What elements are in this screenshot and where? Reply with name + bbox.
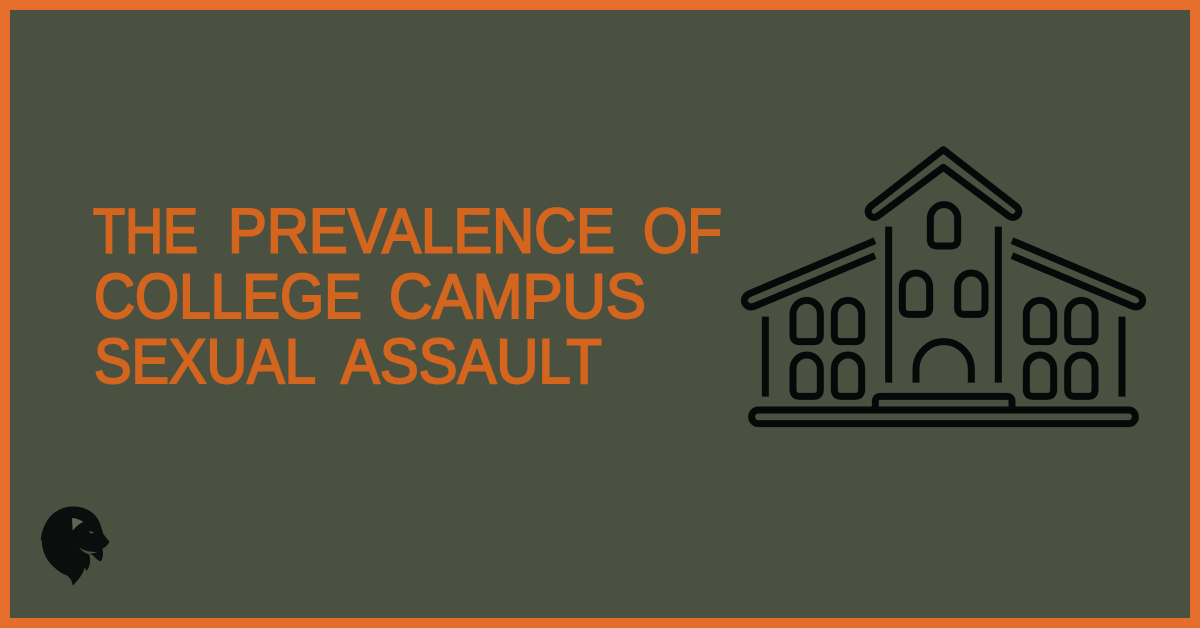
entry step — [875, 396, 1012, 410]
icon: college building — [744, 150, 1143, 424]
icon: lion head logo — [41, 507, 109, 586]
middle windows — [902, 273, 985, 314]
lion jaw gap — [79, 547, 97, 554]
lion eye — [89, 531, 95, 534]
right wing windows — [1026, 300, 1095, 396]
title: CAMPUS — [389, 262, 646, 332]
top gable roof — [868, 150, 1019, 217]
arched door — [916, 342, 971, 383]
title — [93, 196, 722, 397]
building walls — [765, 227, 1122, 397]
left wing windows — [793, 300, 862, 396]
lion silhouette — [41, 507, 109, 586]
title: PREVALENCE — [228, 196, 615, 266]
title: ASSAULT — [341, 327, 602, 397]
title: SEXUAL — [94, 327, 316, 397]
ground base — [752, 410, 1135, 424]
left roof — [744, 241, 875, 307]
title: THE — [93, 196, 198, 266]
top window — [930, 205, 958, 246]
title: COLLEGE — [94, 262, 362, 332]
title: OF — [643, 196, 722, 266]
right roof — [1012, 241, 1143, 307]
lion ear — [72, 518, 83, 531]
